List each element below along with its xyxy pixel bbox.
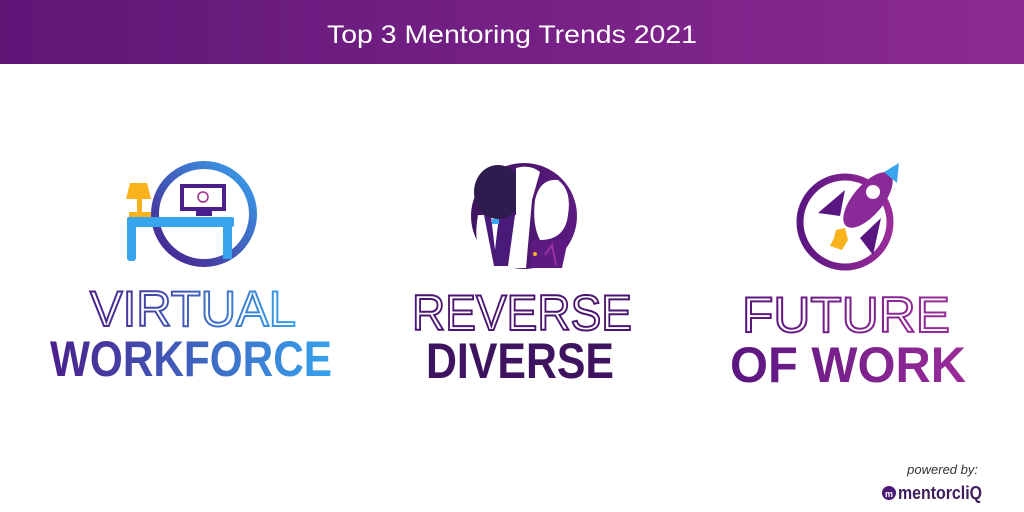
heading: future of work: FUTURE (742, 287, 950, 343)
icon: virtual workforce desk (126, 165, 253, 263)
logo: powered by mentorcliq: m (885, 489, 893, 499)
heading: future of work: OF WORK (730, 337, 966, 393)
logo: powered by mentorcliq (882, 462, 982, 503)
heading: reverse diverse (412, 285, 632, 389)
icon: rocket (800, 163, 901, 267)
icon: reverse diverse people (471, 163, 577, 269)
heading: virtual workforce: VIRTUAL (90, 281, 296, 337)
heading: future of work (730, 287, 966, 393)
heading: reverse diverse: DIVERSE (426, 333, 614, 389)
title: Top 3 Mentoring Trends 2021 (327, 21, 697, 49)
heading: virtual workforce (50, 281, 332, 387)
logo: powered by mentorcliq: powered by: (906, 462, 978, 477)
heading: reverse diverse: REVERSE (412, 285, 632, 341)
logo: powered by mentorcliq: mentorcliQ (898, 483, 982, 503)
header bar (0, 0, 1024, 64)
heading: virtual workforce: WORKFORCE (50, 331, 332, 387)
